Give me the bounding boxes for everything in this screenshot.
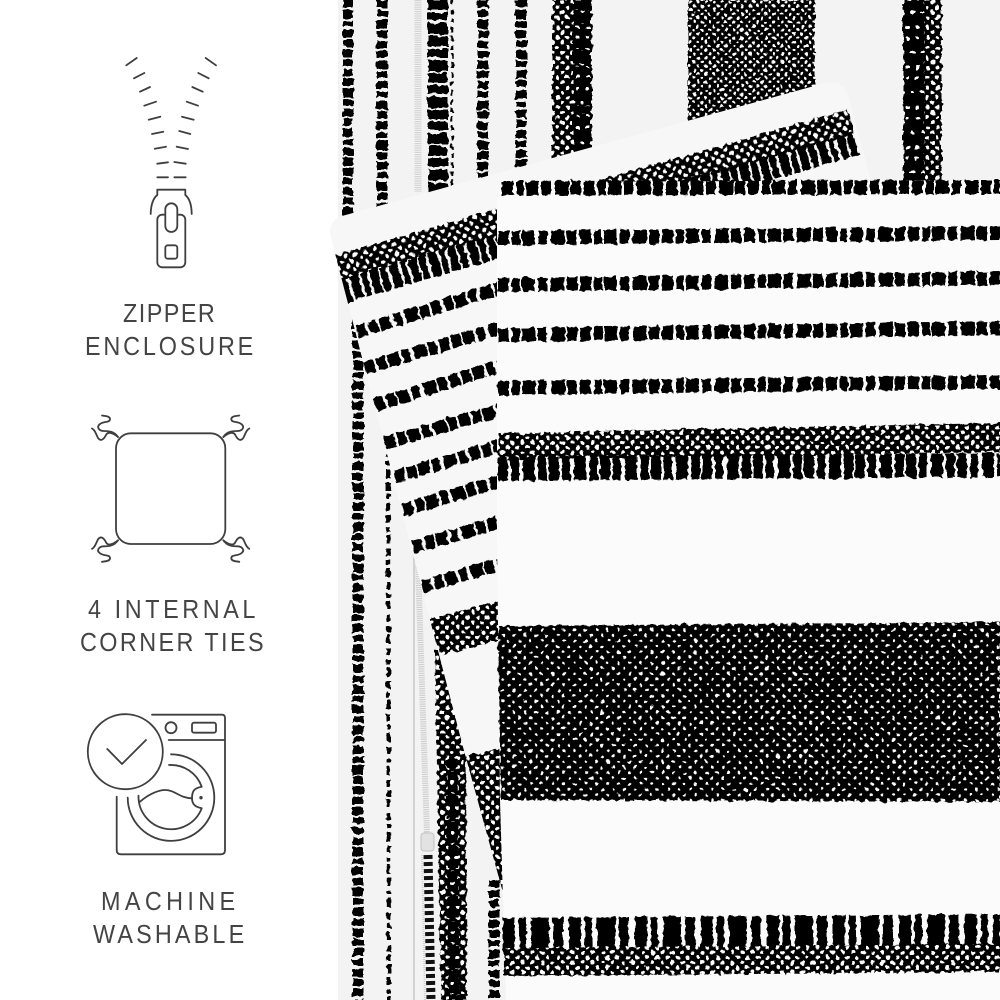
duvet background sheet	[338, 0, 1000, 1000]
zipper on duvet	[414, 0, 434, 1000]
icon: zipper	[126, 58, 216, 267]
duvet stripes	[348, 0, 942, 1000]
label: machine washable: WASHABLE	[93, 921, 244, 949]
label: machine washable	[93, 888, 244, 949]
label: zipper enclosure	[85, 300, 253, 361]
icon: washing machine with check	[88, 714, 225, 854]
panel: product photo	[320, 0, 1000, 1000]
front pillow stripes	[498, 187, 1000, 976]
label: machine washable: MACHINE	[101, 888, 235, 916]
label: 4 internal corner ties: CORNER TIES	[80, 629, 264, 657]
icon: corner ties	[92, 416, 249, 562]
label: 4 internal corner ties	[80, 596, 264, 657]
label: 4 internal corner ties: 4 INTERNAL	[88, 596, 255, 624]
panel: white feature column	[0, 0, 340, 1000]
pillow band	[337, 122, 857, 905]
back pillow	[335, 86, 860, 890]
front pillow	[497, 180, 1000, 1000]
label: zipper enclosure: ENCLOSURE	[85, 333, 253, 361]
label: zipper enclosure: ZIPPER	[123, 300, 215, 328]
